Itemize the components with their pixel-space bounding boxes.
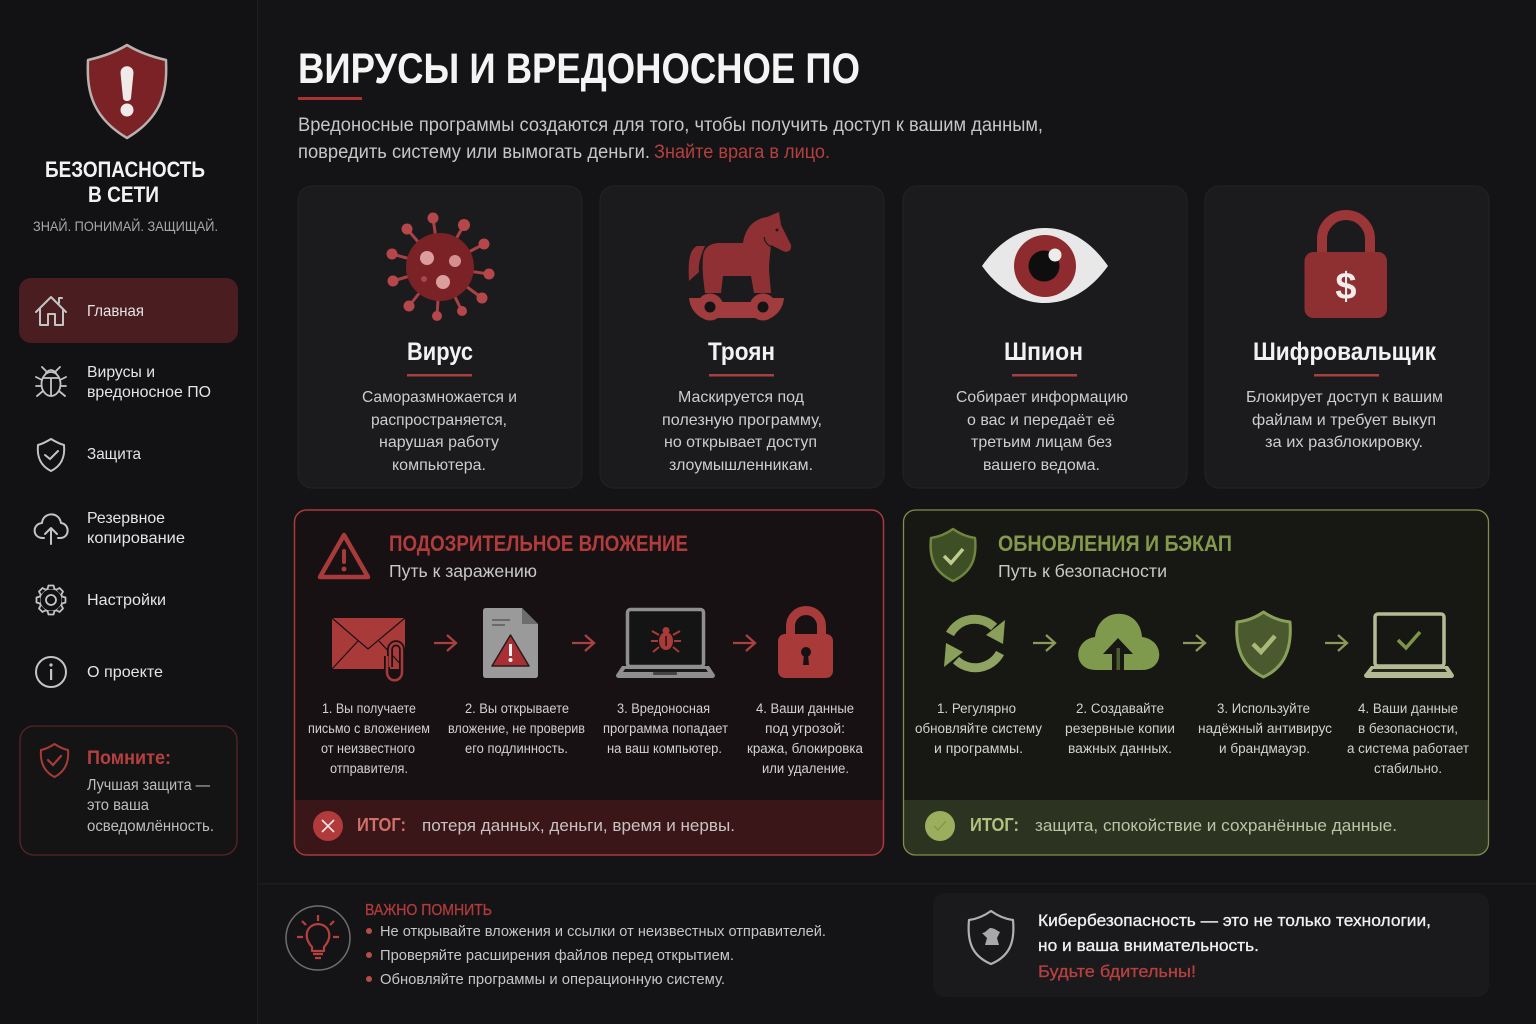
arrow	[733, 635, 755, 651]
intro text: повредить систему или вымогать деньги.	[298, 142, 650, 163]
nav item: viruses: Вирусы и	[87, 364, 155, 381]
panel heading	[998, 531, 1232, 581]
panel: suspicious attachment	[294, 510, 884, 855]
step: 4: стабильно.	[1374, 761, 1442, 776]
card description: полезную программу,	[662, 412, 822, 429]
sidebar heading: В СЕТИ	[88, 182, 159, 207]
card description: за их разблокировку.	[1265, 434, 1423, 451]
callout: remember: это ваша	[87, 797, 149, 814]
card description	[362, 389, 517, 474]
arrow	[1325, 635, 1347, 651]
icon: warning triangle	[320, 535, 368, 577]
icon: shield with emblem	[969, 911, 1013, 964]
intro text	[298, 115, 1043, 163]
nav item: about	[36, 657, 163, 687]
step: 2: его подлинность.	[465, 741, 568, 756]
step: 1: обновляйте систему	[915, 721, 1042, 736]
nav item: protection: Защита	[87, 446, 141, 463]
tips list: Обновляйте программы и операционную систему.	[380, 971, 725, 988]
step: 4: 4. Ваши данные	[756, 701, 854, 716]
step: 1: письмо с вложением	[308, 721, 430, 736]
card description: Маскируется под	[678, 389, 805, 406]
callout: be vigilant	[933, 893, 1489, 997]
panel heading: ОБНОВЛЕНИЯ И БЭКАП	[998, 531, 1232, 556]
step: 2: важных данных.	[1068, 741, 1172, 756]
step: 4	[747, 701, 863, 776]
step: 2: резервные копии	[1065, 721, 1175, 736]
step: 3: надёжный антивирус	[1198, 721, 1332, 736]
card title: Шпион	[1004, 338, 1083, 366]
panel: spy card	[903, 186, 1187, 488]
panel: virus card	[298, 186, 582, 488]
panel: trojan card	[600, 186, 884, 488]
text: Будьте бдительны!	[1038, 962, 1196, 981]
step: 4: кража, блокировка	[747, 741, 863, 756]
nav item: protection	[38, 439, 141, 471]
card title: Вирус	[407, 338, 473, 366]
result: red	[313, 811, 735, 841]
callout: remember: осведомлённость.	[87, 818, 214, 835]
icon: cloud upload	[1078, 614, 1159, 670]
card description: вашего ведома.	[983, 457, 1100, 474]
callout: remember: Лучшая защита —	[87, 777, 210, 794]
panel: updates and backup	[904, 510, 1488, 855]
panel heading: ПОДОЗРИТЕЛЬНОЕ ВЛОЖЕНИЕ	[389, 531, 688, 556]
intro text: Вредоносные программы создаются для того, чтобы получить доступ к вашим данным,	[298, 115, 1043, 136]
step: 4: под угрозой:	[765, 721, 845, 736]
panel: sidebar	[0, 0, 258, 1024]
icon: virus	[386, 212, 494, 321]
nav item: backup	[35, 510, 185, 547]
nav item: backup: Резервное	[87, 510, 165, 527]
text: но и ваша внимательность.	[1038, 936, 1259, 955]
card title: Троян	[708, 338, 775, 366]
card description	[662, 389, 822, 474]
card description: Блокирует доступ к вашим	[1246, 389, 1443, 406]
step: 1: и программы.	[934, 741, 1023, 756]
intro text: Знайте врага в лицо.	[654, 142, 830, 163]
heading: ВАЖНО ПОМНИТЬ	[365, 902, 492, 919]
card description: распространяется,	[371, 412, 507, 429]
icon: safe laptop	[1364, 614, 1454, 678]
sidebar heading: БЕЗОПАСНОСТЬ	[45, 157, 205, 182]
step: 3: 3. Используйте	[1217, 701, 1310, 716]
step: 1	[915, 701, 1042, 756]
step: 4: в безопасности,	[1358, 721, 1458, 736]
step: 2	[1065, 701, 1175, 756]
icon: antivirus shield	[1237, 612, 1290, 677]
panel heading	[389, 531, 688, 581]
step: 3: 3. Вредоносная	[617, 701, 710, 716]
icon: email with attachment	[332, 618, 405, 680]
step: 1	[308, 701, 430, 776]
nav item: home (active): Главная	[87, 303, 144, 320]
result: green	[925, 811, 1397, 841]
step: 2	[448, 701, 585, 756]
icon: ransom lock: $	[1335, 266, 1357, 308]
icon: eye	[982, 228, 1108, 303]
card description: компьютера.	[392, 457, 486, 474]
card description: но открывает доступ	[664, 434, 817, 451]
section: important to remember	[286, 902, 826, 988]
step: 2: 2. Вы открываете	[465, 701, 569, 716]
nav item: viruses	[36, 364, 211, 401]
panel heading: Путь к безопасности	[998, 561, 1167, 581]
card description: третьим лицам без	[971, 434, 1112, 451]
card description	[956, 389, 1128, 474]
step: 3: программа попадает	[603, 721, 728, 736]
card description: нарушая работу	[379, 434, 499, 451]
arrow	[434, 635, 456, 651]
step: 3	[603, 701, 728, 756]
tips list: Не открывайте вложения и ссылки от неизвестных отправителей.	[380, 923, 826, 940]
result: green: ИТОГ:	[970, 815, 1019, 835]
card description: злоумышленникам.	[669, 457, 813, 474]
card description: файлам и требует выкуп	[1252, 412, 1436, 429]
sidebar heading	[45, 157, 205, 207]
step: 3	[1198, 701, 1332, 756]
icon: infected laptop	[616, 610, 715, 678]
icon: lightbulb	[286, 906, 350, 970]
panel: ransomware card	[1205, 186, 1489, 488]
icon: warning shield logo	[88, 45, 166, 138]
icon: trojan horse	[689, 212, 791, 320]
result: red: потеря данных, деньги, время и нервы.	[422, 816, 735, 835]
result: green: защита, спокойствие и сохранённые данные.	[1035, 816, 1397, 835]
card title: Шифровальщик	[1253, 338, 1436, 366]
callout: remember: Помните:	[87, 748, 171, 769]
step: 2: вложение, не проверив	[448, 721, 585, 736]
nav item: home (active)	[19, 278, 238, 343]
nav item: settings	[36, 586, 166, 614]
card description	[1246, 389, 1443, 451]
icon: sync	[944, 619, 1005, 668]
title: ВИРУСЫ И ВРЕДОНОСНОЕ ПО	[298, 45, 860, 93]
arrow	[1183, 635, 1205, 651]
step: 4: 4. Ваши данные	[1358, 701, 1458, 716]
result: red: ИТОГ:	[357, 815, 406, 835]
icon: infected document	[483, 608, 538, 678]
step: 3: и брандмауэр.	[1219, 741, 1310, 756]
nav item: settings: Настройки	[87, 592, 166, 609]
step: 1: от неизвестного	[321, 741, 415, 756]
callout: remember	[20, 726, 237, 855]
step: 4	[1347, 701, 1469, 776]
text: Кибербезопасность — это не только технологии,	[1038, 911, 1431, 930]
step: 2: 2. Создавайте	[1076, 701, 1164, 716]
icon: ransom lock	[1304, 215, 1387, 318]
icon: green shield	[931, 529, 975, 581]
step: 3: на ваш компьютер.	[607, 741, 722, 756]
step: 4: а система работает	[1347, 741, 1469, 756]
arrow	[1033, 635, 1055, 651]
text	[1038, 911, 1431, 981]
tips list	[366, 923, 826, 988]
nav item: about: О проекте	[87, 664, 163, 681]
arrow	[572, 635, 594, 651]
step: 4: или удаление.	[762, 761, 849, 776]
tips list: Проверяйте расширения файлов перед открытием.	[380, 947, 734, 964]
step: 1: 1. Вы получаете	[322, 701, 416, 716]
nav item: backup: копирование	[87, 530, 185, 547]
step: 1: 1. Регулярно	[937, 701, 1016, 716]
panel heading: Путь к заражению	[389, 561, 537, 581]
icon: padlock	[778, 610, 833, 678]
step: 1: отправителя.	[330, 761, 408, 776]
card description: Собирает информацию	[956, 389, 1128, 406]
card description: Саморазмножается и	[362, 389, 517, 406]
nav item: viruses: вредоносное ПО	[87, 384, 211, 401]
card description: о вас и передаёт её	[967, 412, 1115, 429]
sidebar tagline: ЗНАЙ. ПОНИМАЙ. ЗАЩИЩАЙ.	[33, 217, 218, 234]
